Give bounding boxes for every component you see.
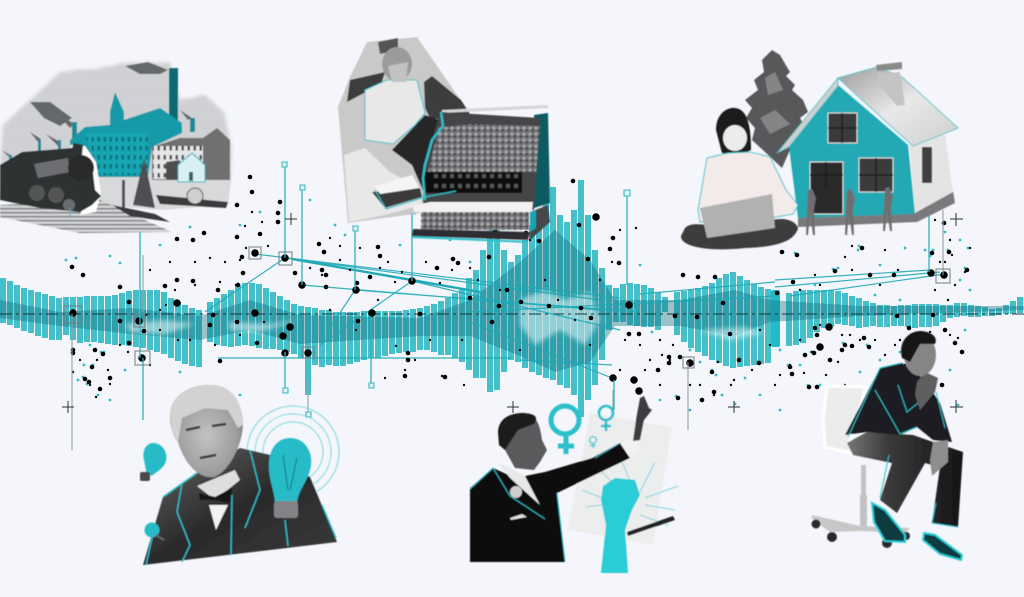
paper sheet bbox=[568, 413, 672, 545]
upper window bbox=[828, 113, 857, 143]
right window bbox=[859, 158, 893, 192]
tree highlights bbox=[760, 72, 790, 134]
hull and paddle steamer bbox=[112, 195, 228, 222]
dark furniture bbox=[347, 72, 475, 122]
illustration: seated man bbox=[812, 331, 963, 560]
bulb filament bbox=[283, 455, 297, 490]
chair stem bbox=[860, 465, 867, 527]
teal suit outline bbox=[470, 443, 620, 562]
teal pin stems bbox=[140, 165, 929, 420]
glow rings bbox=[247, 406, 339, 498]
gray warehouse bbox=[152, 128, 230, 180]
tall chimney bbox=[169, 68, 178, 122]
register line bbox=[375, 190, 456, 209]
jeans bbox=[847, 432, 963, 527]
tiny black dots bbox=[73, 212, 970, 397]
chair base bbox=[812, 515, 910, 533]
photo background bbox=[338, 37, 475, 223]
eye shadow and mouth bbox=[186, 424, 226, 458]
illustration: woman and house bbox=[681, 50, 958, 249]
wheels bbox=[29, 185, 75, 211]
left roof strip bbox=[777, 78, 838, 153]
door bbox=[810, 162, 843, 214]
keys bbox=[424, 172, 522, 193]
cash register body bbox=[423, 112, 540, 210]
bow tie bbox=[199, 488, 232, 503]
pale blue house bbox=[178, 153, 205, 182]
centre dashed axis bbox=[0, 313, 1024, 315]
drawer top bbox=[413, 202, 533, 212]
house teal front bbox=[789, 85, 915, 218]
lapel flower bbox=[510, 486, 522, 498]
smoke bbox=[2, 62, 192, 158]
shirt front bbox=[209, 505, 228, 530]
female symbol small bbox=[590, 437, 596, 448]
three small runners bbox=[806, 187, 893, 235]
hair bbox=[716, 108, 751, 156]
smokebox bbox=[68, 155, 94, 181]
medium black dots bbox=[72, 177, 967, 400]
shirt bbox=[845, 363, 952, 442]
drawer ornate bbox=[421, 212, 529, 230]
tall solid bar bbox=[771, 290, 780, 347]
suit bbox=[143, 448, 337, 565]
shirt collar bbox=[497, 462, 540, 505]
legs bbox=[681, 219, 798, 249]
laptop bbox=[700, 194, 775, 238]
sail boat bbox=[122, 158, 155, 210]
raised fist and arm bbox=[601, 478, 640, 573]
small teal dots bbox=[66, 200, 970, 410]
roof bbox=[838, 67, 958, 146]
illustration: typist photo and cash register bbox=[338, 37, 550, 242]
raised hand bbox=[633, 396, 652, 441]
castors bbox=[812, 520, 910, 548]
chimney bbox=[878, 72, 905, 106]
large light bulb bbox=[269, 438, 311, 503]
tiny bulb bbox=[144, 522, 164, 540]
pale highlights bbox=[125, 290, 765, 345]
pen bbox=[627, 516, 675, 536]
gray pin stems bbox=[72, 210, 943, 450]
teal stem bbox=[69, 208, 71, 218]
face mask bbox=[723, 125, 747, 151]
illustration: civil rights portrait bbox=[470, 396, 678, 573]
square pin heads bbox=[282, 162, 630, 417]
ground bbox=[0, 200, 172, 233]
cash register top bar bbox=[442, 105, 548, 113]
side window bbox=[922, 147, 932, 183]
pine tree bbox=[745, 50, 808, 168]
typist blouse bbox=[365, 80, 425, 144]
engraved sky bbox=[0, 62, 232, 195]
illustration: inventor portrait bbox=[140, 385, 339, 565]
connector lines bbox=[205, 254, 945, 378]
register teal edge bbox=[423, 112, 443, 200]
illustration: factory engraving bbox=[0, 62, 232, 233]
dark trees bbox=[166, 160, 182, 180]
right shoe bbox=[923, 533, 962, 560]
locomotive bbox=[0, 143, 101, 212]
hair bbox=[901, 331, 936, 362]
female symbol medium bbox=[599, 406, 613, 431]
blouse bbox=[698, 152, 798, 222]
scatter dots bbox=[66, 177, 970, 410]
desk dark area bbox=[392, 115, 440, 195]
small bulb bbox=[140, 443, 166, 481]
window panes bbox=[810, 113, 893, 192]
factory windows bbox=[85, 133, 148, 175]
house side wall bbox=[909, 134, 953, 213]
dark overlap band bbox=[0, 230, 1024, 372]
forearm bbox=[915, 372, 938, 410]
teal lapel lines bbox=[146, 450, 336, 565]
data pins bbox=[62, 162, 963, 450]
house base bbox=[798, 191, 955, 227]
waveform bars bbox=[3, 180, 1020, 417]
picture frame bbox=[378, 38, 398, 54]
head bbox=[498, 413, 547, 470]
suit bbox=[470, 443, 630, 562]
large black dots bbox=[73, 217, 944, 391]
waveform chart bbox=[0, 180, 1024, 417]
ornate dome bbox=[428, 124, 540, 172]
typist head bbox=[382, 47, 412, 81]
drawer side bbox=[530, 205, 550, 240]
plus markers bbox=[62, 213, 963, 413]
rays bbox=[582, 462, 678, 525]
white warehouse front bbox=[153, 146, 203, 179]
typist face bbox=[388, 62, 408, 82]
white hair bbox=[170, 385, 243, 442]
hair bbox=[498, 413, 536, 450]
book bbox=[372, 188, 422, 208]
cuff bbox=[620, 437, 640, 458]
pocket square bbox=[510, 514, 527, 520]
drawer base bbox=[412, 229, 530, 240]
square target frames bbox=[64, 247, 950, 368]
bulb base bbox=[274, 501, 298, 518]
cash register side bbox=[534, 113, 550, 208]
boiler highlight bbox=[34, 158, 70, 178]
head bbox=[904, 334, 936, 376]
white paper stack bbox=[344, 148, 422, 222]
teal shirt outlines bbox=[848, 363, 958, 527]
left shoe bbox=[872, 503, 905, 542]
locomotive halo bbox=[70, 145, 101, 215]
head bbox=[170, 385, 243, 477]
light yard bbox=[95, 172, 232, 210]
teal factory building bbox=[70, 92, 182, 177]
hand on knee bbox=[930, 440, 948, 476]
small chimneys bbox=[9, 118, 195, 166]
paddle wheel bbox=[187, 188, 203, 204]
female symbol large bbox=[551, 406, 579, 454]
collar bbox=[197, 470, 240, 500]
chair back bbox=[823, 386, 866, 455]
